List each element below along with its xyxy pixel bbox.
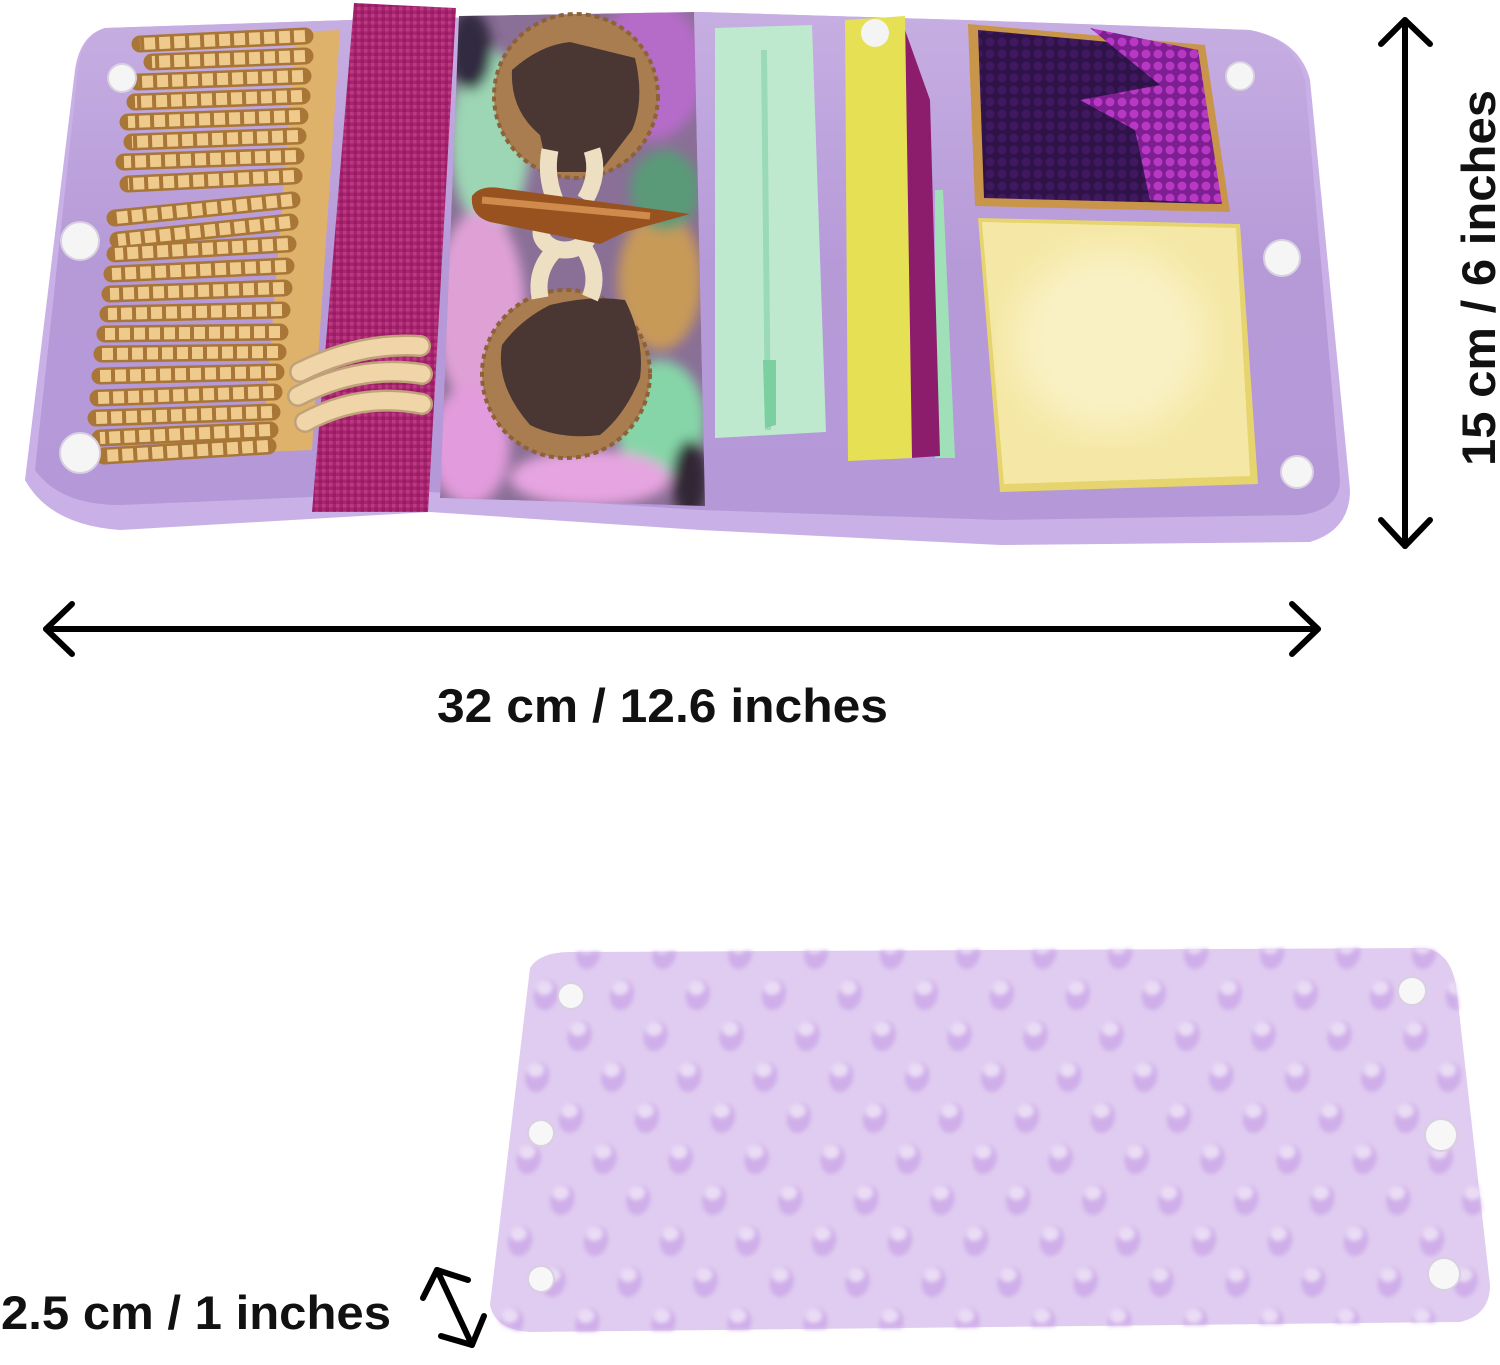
gold fringe: [96, 30, 340, 456]
back snap buttons: [528, 977, 1460, 1292]
yellow fur patch: [978, 218, 1258, 492]
rope loops: [539, 150, 595, 298]
arrow: height: [1381, 20, 1430, 546]
floral fabric panel: [430, 0, 708, 520]
label: width: 32 cm / 12.6 inches: [437, 679, 888, 732]
arrow: width: [46, 604, 1318, 654]
mat plush body: [25, 12, 1350, 545]
product photo: fidget mat back: [490, 948, 1490, 1332]
leather button bottom: [482, 290, 650, 458]
magenta webbing strap: [312, 3, 456, 512]
dimpled plush back: [490, 948, 1490, 1332]
horn toggle: [472, 187, 690, 244]
mint zipper panel: [715, 25, 826, 438]
sequin panel: [968, 24, 1230, 212]
dimple pattern: [490, 948, 1490, 1332]
snap buttons: [60, 62, 1313, 488]
leather button top: [494, 14, 658, 178]
arrow: thickness: [423, 1270, 484, 1345]
label: thickness: 2.5 cm / 1 inches: [1, 1286, 391, 1339]
product photo: fidget mat front: [25, 0, 1350, 545]
wooden rings: [298, 346, 422, 422]
ribbons: [845, 16, 955, 461]
snap on ribbon: [861, 19, 889, 47]
